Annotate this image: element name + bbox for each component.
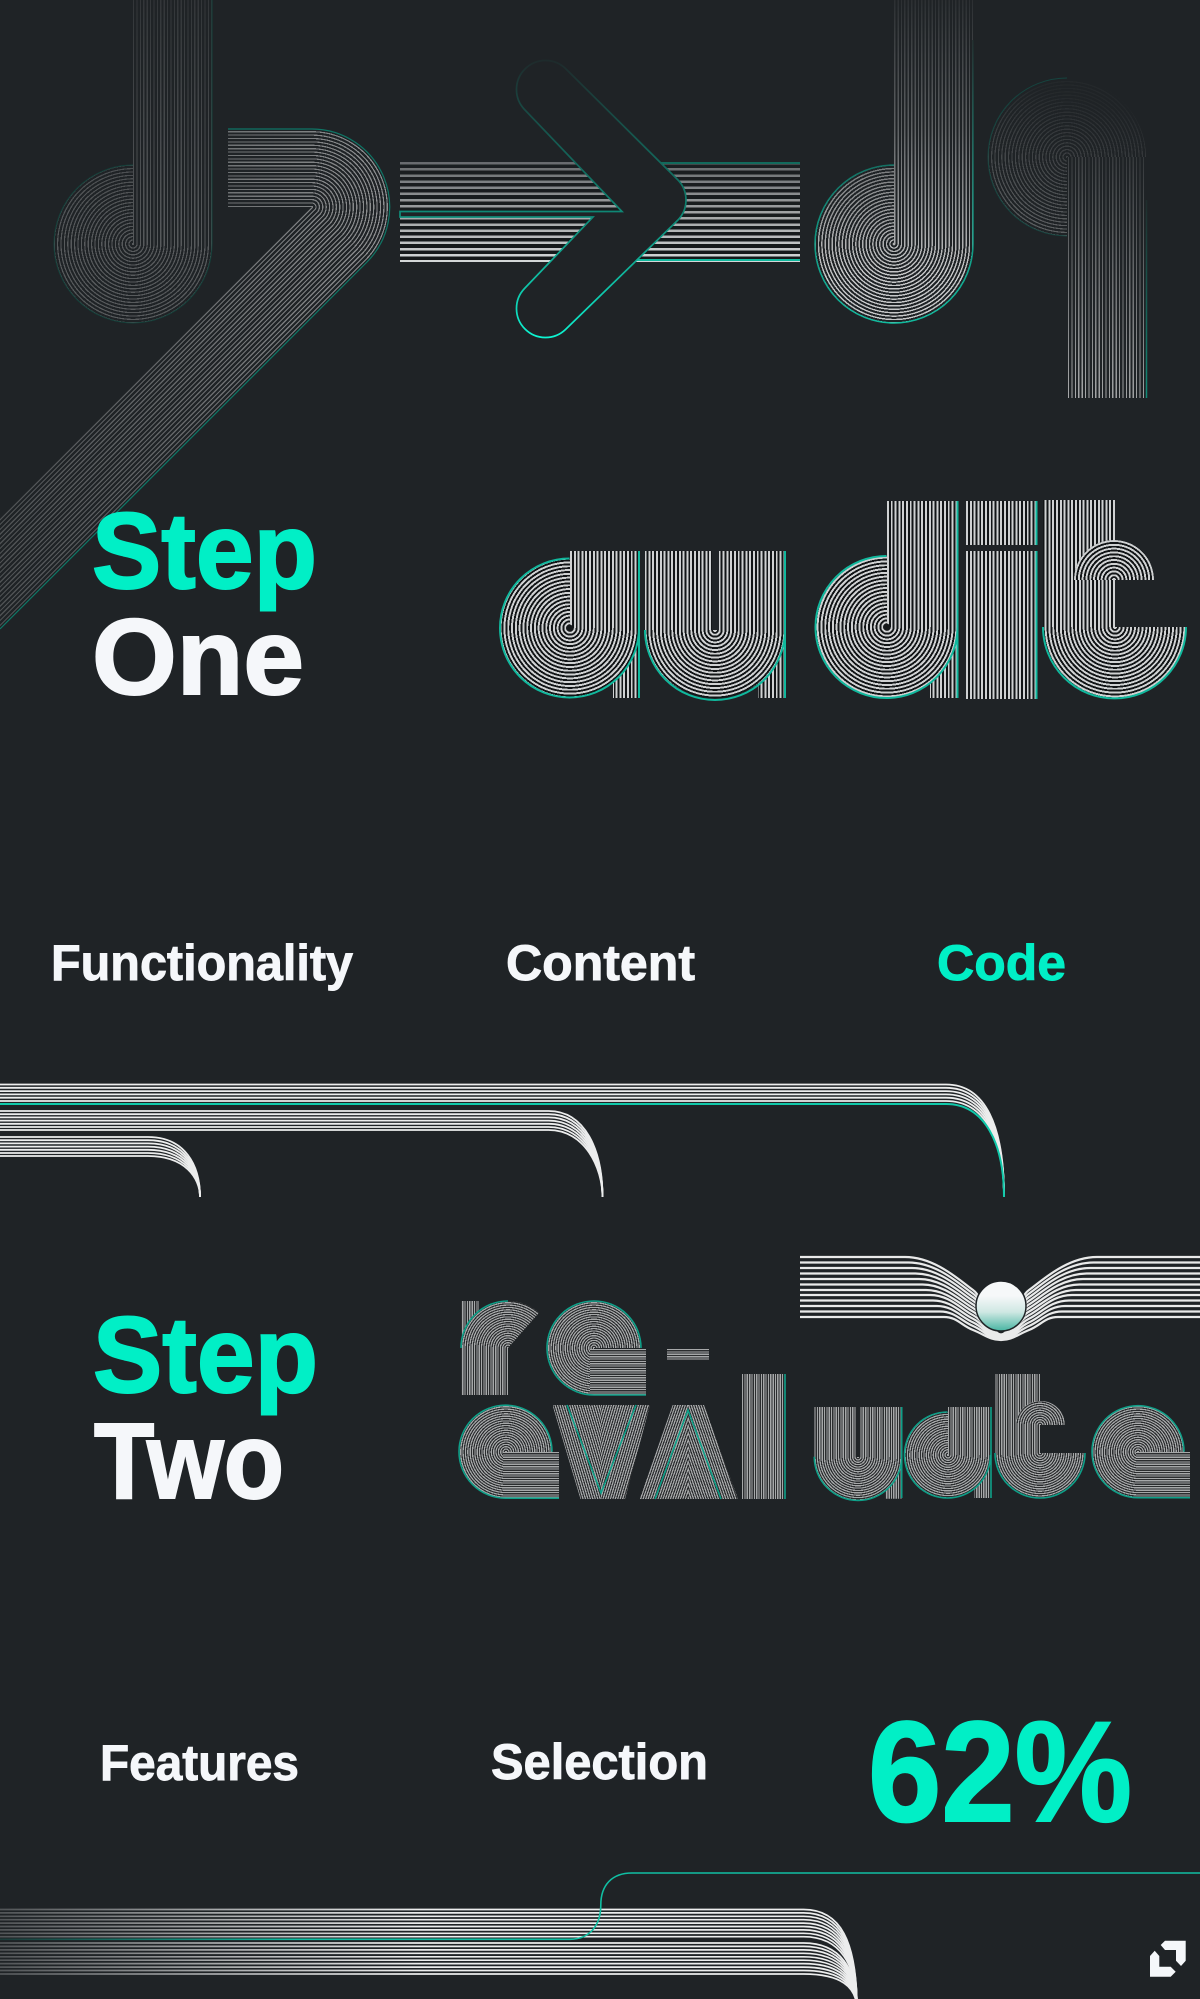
ball resting in the wave bbox=[976, 1281, 1026, 1331]
statistic: 62%: 62% bbox=[868, 1693, 1132, 1852]
heading: Step Two: Step bbox=[93, 1294, 318, 1415]
wave of lines dipping under the ball bbox=[800, 1257, 1200, 1340]
display word: audit, drawn in concentric lines bbox=[501, 500, 1185, 699]
heading: Step Two: Two bbox=[94, 1400, 284, 1521]
heading: Step One bbox=[92, 490, 317, 717]
labels row one: Code bbox=[937, 935, 1066, 991]
labels row two: Selection bbox=[491, 1734, 708, 1790]
ring centre dots in audit bbox=[566, 624, 890, 632]
line art: nine shape top right bbox=[988, 92, 1146, 398]
labels row two bbox=[100, 1734, 708, 1791]
icon: logo mark bbox=[1150, 1941, 1186, 1977]
letter a bbox=[501, 551, 638, 698]
line art: dim d shape top left bbox=[54, 0, 212, 322]
heading: Step Two bbox=[93, 1294, 318, 1521]
three curved line bands, middle of page bbox=[0, 1084, 1004, 1197]
letter u bbox=[645, 551, 784, 698]
letter r bbox=[461, 1301, 539, 1395]
heading: Step One: Step bbox=[92, 490, 317, 611]
hyphen bbox=[667, 1349, 709, 1360]
line art: bright d shape top right bbox=[816, 0, 973, 322]
teal edges of the top line shapes bbox=[0, 0, 1146, 629]
teal rules on the right of the arrow stripes bbox=[630, 163, 800, 260]
arrow chevron bbox=[400, 60, 686, 338]
letter e, second line bbox=[460, 1406, 559, 1498]
line art: diagonal seven shape bbox=[0, 131, 388, 626]
teal outlines of the word audit bbox=[500, 501, 1190, 741]
labels row one bbox=[51, 935, 1066, 991]
heading: Step One: One bbox=[92, 596, 304, 717]
letter v bbox=[553, 1405, 650, 1499]
letter i bbox=[966, 501, 1036, 699]
letter e, end of second line bbox=[1092, 1406, 1190, 1497]
labels row one: Functionality bbox=[51, 935, 353, 991]
letter l bbox=[742, 1374, 785, 1499]
letter t bbox=[1043, 500, 1185, 698]
letter a without crossbar bbox=[640, 1405, 738, 1499]
letter d bbox=[816, 501, 956, 698]
letter u, second line bbox=[814, 1407, 902, 1500]
labels row one: Content bbox=[506, 935, 695, 991]
letter e bbox=[548, 1302, 646, 1394]
teal outlines of the word re-evaluate bbox=[459, 1301, 1190, 1521]
horizontal stripes behind the arrow bbox=[400, 162, 800, 262]
display word: re-evaluate, drawn in fine lines bbox=[460, 1301, 1190, 1500]
labels row two: Features bbox=[100, 1735, 299, 1791]
letter t, second line bbox=[995, 1374, 1084, 1497]
teal line stepping up at the bottom bbox=[0, 1873, 1200, 1939]
letter a, second line bbox=[905, 1407, 990, 1498]
bottom line bands bbox=[0, 1910, 857, 1999]
